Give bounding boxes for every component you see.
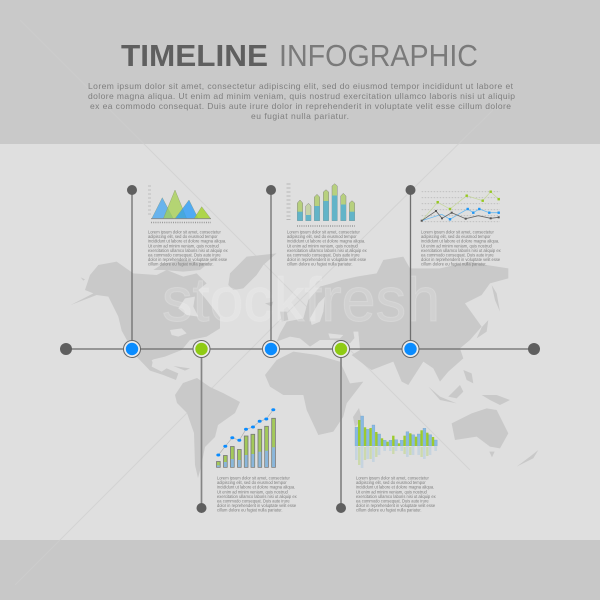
timeline: upper stems [132,190,410,349]
text block 5: cillum dolore eu fugiat nulla pariatur. [356,508,422,513]
text block 4: incididunt ut labore et dolore magna aliqua. [217,485,295,490]
text block 5: dolor in reprehenderit in voluptate velit esse [356,503,436,508]
text block 2: incididunt ut labore et dolore magna aliqua. [287,239,365,244]
text block 1: dolor in reprehenderit in voluptate velit esse [148,257,228,262]
text block 3: cillum dolore eu fugiat nulla pariatur. [421,262,487,267]
node 1 [124,340,140,358]
text block 2: adipiscing elit, sed do eiusmod tempor [287,234,357,239]
text block 2: dolor in reprehenderit in voluptate velit esse [287,257,367,262]
intro paragraph: ex ea commodo consequat. Duis aute irure dolor in reprehenderit in voluptate velit esse cillum dolore [90,101,511,111]
chart: rising bars with dotted trend [216,408,275,467]
map: north america [71,253,277,380]
text block 4 [217,476,297,513]
text block 5: ea commodo consequat. Duis aute irure [356,498,429,504]
map: south america [175,378,240,478]
intro paragraph: Lorem ipsum dolor sit amet, consectetur adipiscing elit, sed do eiusmod tempor incididunt ut labore et [88,81,514,91]
intro paragraph: dolore magna aliqua. Ut enim ad minim veniam, quis nostrud exercitation ullamco laboris nisi ut aliquip [88,91,515,101]
text block 1: exercitation ullamco laboris nisi ut aliquip ex [148,248,228,253]
text block 1: incididunt ut labore et dolore magna aliqua. [148,239,226,244]
text block 3: Ut enim ad minim veniam, quis nostrud [421,243,492,248]
text block 2: Ut enim ad minim veniam, quis nostrud [287,243,358,248]
text block 5: adipiscing elit, sed do eiusmod tempor [356,480,426,485]
map: africa [265,352,363,435]
text block 1: cillum dolore eu fugiat nulla pariatur. [148,262,214,267]
node 4 [332,340,350,358]
text block 5 [356,476,436,513]
text block 1: Lorem ipsum dolor sit amet, consectetur [148,230,221,234]
text block 1 [148,230,228,267]
intro paragraph [88,81,515,121]
map: madagascar [353,408,362,427]
watermark: stockfresh [162,266,440,335]
text block 4: exercitation ullamco laboris nisi ut aliquip ex [217,494,297,499]
text block 2 [287,230,367,267]
text block 2: exercitation ullamco laboris nisi ut aliquip ex [287,248,367,253]
text block 2: Lorem ipsum dolor sit amet, consectetur [287,230,360,234]
text block 4: cillum dolore eu fugiat nulla pariatur. [217,508,283,513]
chart: house bars [286,184,355,226]
title: light word: INFOGRAPHIC [279,38,478,73]
intro paragraph: eu fugiat nulla pariatur. [251,111,349,121]
text block 3: adipiscing elit, sed do eiusmod tempor [421,234,491,239]
text block 3: Lorem ipsum dolor sit amet, consectetur [421,230,494,234]
panel: footer band [0,540,600,600]
text block 3: exercitation ullamco laboris nisi ut aliquip ex [421,248,501,253]
text block 3: ea commodo consequat. Duis aute irure [421,252,494,258]
timeline [60,185,540,513]
map: eurasia [265,257,538,467]
title [121,38,478,73]
chart: dense bars with reflection [355,416,437,468]
timeline: end dots [60,343,540,355]
text block 1: Ut enim ad minim veniam, quis nostrud [148,243,219,248]
title: bold word: TIMELINE [121,38,268,73]
text block 5: exercitation ullamco laboris nisi ut aliquip ex [356,494,436,499]
node 5 [402,340,419,358]
text block 4: Lorem ipsum dolor sit amet, consectetur [217,476,290,480]
text block 3 [421,230,501,267]
node 3 [262,340,280,358]
text block 3: dolor in reprehenderit in voluptate velit esse [421,257,501,262]
text block 2: cillum dolore eu fugiat nulla pariatur. [287,262,353,267]
text block 4: dolor in reprehenderit in voluptate velit esse [217,503,297,508]
text block 1: ea commodo consequat. Duis aute irure [148,252,221,258]
text block 4: Ut enim ad minim veniam, quis nostrud [217,489,288,494]
world map [71,253,538,478]
timeline: stem dots [127,185,416,513]
chart: line graph [421,190,500,222]
text block 5: incididunt ut labore et dolore magna aliqua. [356,485,434,490]
chart: mountain triangles [148,186,211,222]
text block 2: ea commodo consequat. Duis aute irure [287,252,360,258]
text block 4: adipiscing elit, sed do eiusmod tempor [217,480,287,485]
text block 1: adipiscing elit, sed do eiusmod tempor [148,234,218,239]
text block 4: ea commodo consequat. Duis aute irure [217,498,290,504]
panel: header band [0,0,600,144]
text block 5: Lorem ipsum dolor sit amet, consectetur [356,476,429,480]
timeline: horizontal axis [66,348,534,350]
text block 3: incididunt ut labore et dolore magna aliqua. [421,239,499,244]
node 2 [193,340,210,358]
text block 5: Ut enim ad minim veniam, quis nostrud [356,489,427,494]
panel: main band [0,144,600,540]
timeline: lower stems [202,349,341,508]
